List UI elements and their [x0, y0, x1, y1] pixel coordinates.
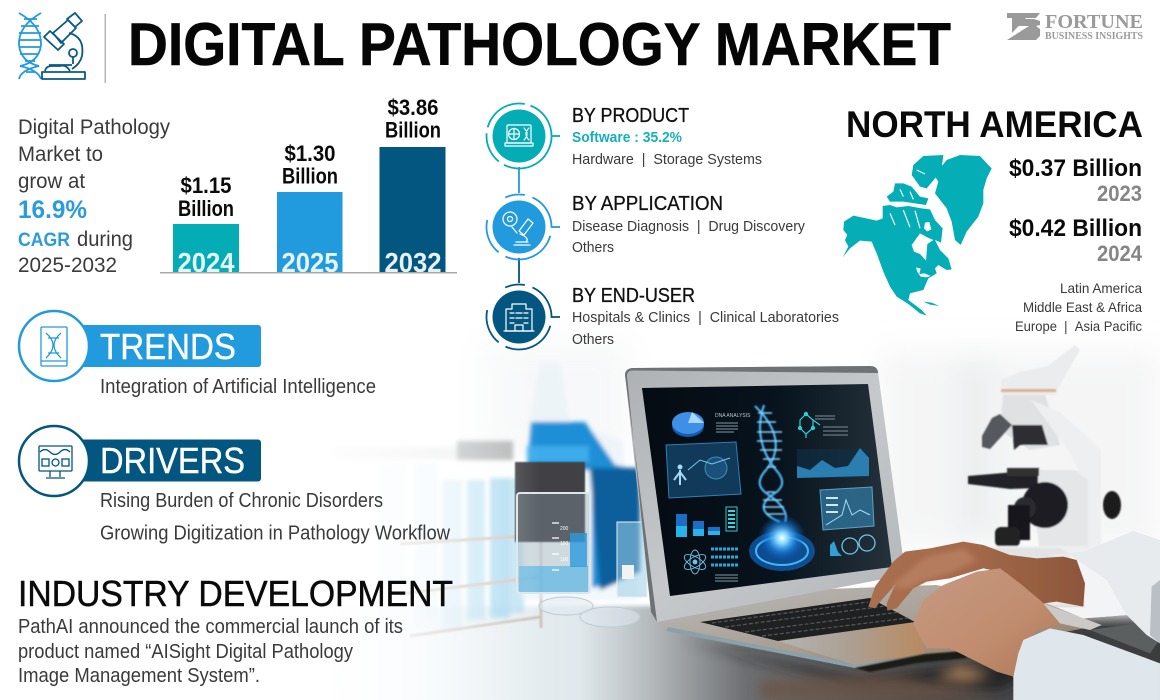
text block: CAGR summary: Digital Pathology [18, 116, 170, 139]
drivers items: Growing Digitization in Pathology Workflow [100, 522, 450, 544]
industry development heading: INDUSTRY DEVELOPMENT [18, 573, 453, 614]
text block: CAGR summary: 2025-2032 [18, 254, 117, 277]
badge: by end-user [476, 274, 562, 360]
laptop [625, 366, 1101, 700]
screen: area chart [797, 448, 869, 478]
other regions list: Europe | Asia Pacific [1015, 318, 1142, 334]
front palm rest and trackpad [778, 622, 925, 665]
segment connector lower [518, 258, 520, 283]
screen: meter rows [711, 549, 738, 565]
bar 2032: 2032 [384, 247, 442, 278]
drivers items: Rising Burden of Chronic Disorders [100, 490, 383, 512]
base right strip [1043, 603, 1102, 630]
logo: Fortune Business Insights [1007, 11, 1143, 42]
segment text: by product: Hardware | Storage Systems [572, 151, 762, 168]
dark box behind beaker [515, 462, 585, 542]
microscope [968, 345, 1121, 585]
DNA strand [19, 13, 41, 79]
industry development text: PathAI announced the commercial launch of its [18, 616, 403, 638]
region stats: 2023 [1097, 181, 1142, 206]
trends banner [70, 325, 261, 367]
map: North America [843, 155, 992, 316]
text block: CAGR summary: during [77, 228, 133, 251]
panel: trends [19, 311, 376, 398]
blurred window backdrop [480, 340, 1160, 550]
value label 2025 [282, 141, 338, 188]
screen: body scan panel [666, 442, 741, 498]
drivers badge [19, 426, 89, 496]
rear sleeve [1050, 531, 1160, 643]
Great Lakes [916, 267, 931, 277]
bar 2032 [380, 147, 446, 278]
title: DIGITAL PATHOLOGY MARKET [128, 11, 951, 78]
other regions list: Latin America [1060, 280, 1142, 296]
other regions list [1015, 280, 1142, 334]
glass beaker: 200 [560, 526, 569, 532]
badge: by application [476, 184, 562, 270]
front sleeve [1013, 628, 1160, 700]
front hand [913, 568, 1060, 677]
bar 2025 [277, 192, 342, 278]
chart baseline [160, 272, 457, 274]
trends item: Integration of Artificial Intelligence [100, 376, 376, 398]
panel: drivers [19, 426, 450, 544]
region stats [1009, 155, 1143, 266]
icon: laboratory building [504, 304, 534, 331]
icon: laptop with DNA [505, 125, 533, 146]
screen: gauges [830, 535, 875, 556]
value label 2024: Billion [178, 196, 234, 221]
drivers items [100, 490, 450, 544]
desk patch right of sleeve [1090, 623, 1158, 653]
segment text: by application: Disease Diagnosis | Drug Discovery [572, 218, 805, 235]
small beaker [617, 522, 647, 597]
value label 2024: $1.15 [180, 173, 232, 198]
value label 2024 [178, 173, 234, 221]
bar 2024: 2024 [178, 247, 235, 278]
segment text: by product [572, 104, 762, 168]
segment text: by application: BY APPLICATION [572, 192, 723, 215]
petri dishes [539, 597, 640, 627]
text block: CAGR summary: grow at [18, 170, 85, 193]
soft fade over left of photo [300, 350, 540, 700]
segment text: by application: Others [572, 239, 614, 256]
screen: molecule [798, 412, 820, 438]
logo wordmark: FORTUNE [1045, 11, 1143, 33]
text block: CAGR summary: Market to [18, 143, 103, 166]
screen: label: DNA ANALYSIS [715, 413, 751, 419]
segment text: by end-user: Hospitals & Clinics | Clinical Laboratories [572, 309, 839, 326]
keyboard [700, 598, 915, 641]
header icon: DNA and microscope [19, 13, 85, 79]
laptop lid [625, 366, 905, 622]
region stats: $0.37 Billion [1009, 155, 1142, 182]
bar chart: market size [160, 95, 457, 278]
other regions list: Middle East & Africa [1023, 299, 1142, 315]
text block: CAGR summary [18, 116, 170, 277]
icon: DNA book [41, 327, 67, 366]
glass beaker: 100 [560, 557, 569, 563]
value label 2032 [385, 95, 441, 142]
arctic channels [890, 170, 925, 228]
screen: pie chart [672, 412, 704, 437]
drivers banner [70, 440, 261, 482]
desk surface [0, 598, 1160, 700]
laptop base [657, 585, 1101, 668]
hands and sleeves [868, 531, 1160, 700]
Ellesmere Island [912, 155, 943, 188]
screen: atom [682, 550, 708, 574]
value label 2032: Billion [385, 118, 441, 142]
industry development text: product named “AISight Digital Pathology [18, 641, 353, 663]
segment connector lines [518, 167, 520, 193]
desk reflections under laptop [760, 665, 1000, 700]
value label 2025: $1.30 [284, 141, 336, 166]
screen: dashboard panel [820, 487, 874, 530]
text block: CAGR summary: CAGR [18, 230, 70, 251]
industry development text [18, 616, 403, 687]
laptop front edge [855, 651, 967, 672]
logo mark [1007, 13, 1040, 40]
trends badge [19, 311, 89, 381]
text block: CAGR summary: 16.9% [18, 196, 87, 224]
microscope line icon [42, 13, 85, 79]
badge: by product [477, 94, 561, 178]
bar 2024 [173, 224, 239, 278]
laptop screen [642, 384, 892, 596]
icon: microscope and virus [503, 212, 533, 245]
drivers label: DRIVERS [100, 440, 245, 481]
region stats: $0.42 Billion [1009, 215, 1142, 242]
segment text: by application [572, 192, 805, 256]
header divider [104, 14, 106, 83]
Foxe Basin [924, 222, 931, 231]
segment text: by end-user [572, 284, 839, 348]
screen: hologram glow [749, 514, 815, 571]
central arctic islands [887, 183, 928, 205]
glass beaker [517, 493, 590, 593]
icon: monitor [39, 446, 72, 478]
bar 2025: 2025 [282, 247, 338, 278]
industry development text: Image Management System”. [18, 665, 260, 687]
screen: text lines [715, 416, 848, 581]
value label 2025: Billion [282, 164, 338, 188]
screen: DNA helix [755, 405, 786, 522]
glass beaker: 150 [560, 541, 569, 547]
segment text: by product: BY PRODUCT [572, 104, 689, 127]
laptop shadow [680, 640, 1100, 690]
screen: bar chart [676, 507, 737, 537]
trends label: TRENDS [100, 326, 236, 367]
blue flask [520, 362, 640, 600]
glassware: test tubes and rack [333, 441, 543, 636]
mainland [843, 205, 952, 316]
value label 2032: $3.86 [388, 95, 438, 120]
logo tagline: BUSINESS INSIGHTS [1045, 31, 1143, 42]
background photo: laboratory with laptop [0, 340, 1160, 700]
segment text: by product: Software : 35.2% [572, 130, 682, 146]
segment text: by end-user: BY END-USER [572, 284, 695, 307]
region stats: 2024 [1097, 241, 1143, 266]
segment text: by end-user: Others [572, 331, 614, 348]
rear hand highlight [890, 548, 977, 588]
Greenland [935, 155, 992, 245]
rear hand [868, 542, 1085, 611]
Cuba [923, 302, 939, 306]
region heading: NORTH AMERICA [846, 104, 1143, 145]
Hudson Bay [912, 233, 933, 261]
